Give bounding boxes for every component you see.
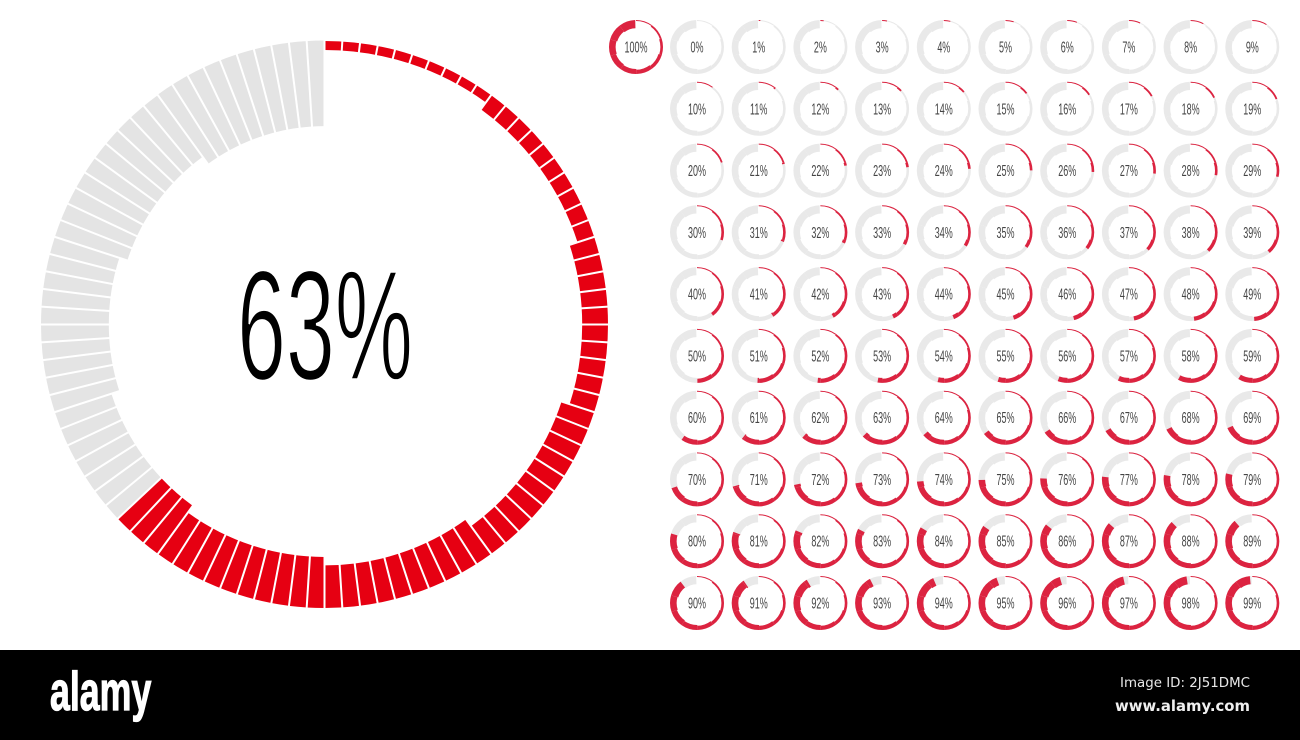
gauge 54% [917,329,970,382]
gauge 34%: 34% [935,224,953,241]
image id: Image ID: 2J51DMC [1120,675,1250,691]
footer bar [0,650,1300,740]
gauge 37%: 37% [1120,224,1138,241]
gauge 60% [670,391,724,444]
gauge 18% [1164,82,1217,135]
gauge 35% [979,206,1032,259]
gauge 65%: 65% [997,410,1014,427]
row of gauges 30 to 39 [670,206,1279,259]
gauge 37% [1102,206,1155,259]
gauge 67%: 67% [1120,410,1138,427]
gauge 49%: 49% [1243,286,1261,303]
gauge 54%: 54% [935,348,953,365]
gauge 50%: 50% [688,348,706,365]
gauge 29%: 29% [1243,163,1261,180]
gauge 36% [1041,206,1094,259]
gauge 13%: 13% [873,101,891,118]
gauge 69% [1226,391,1279,444]
gauge 8%: 8% [1184,39,1197,56]
gauge 24% [917,144,970,197]
gauge 28% [1164,144,1217,197]
gauge 32% [794,206,847,259]
gauge 21% [732,144,785,197]
gauge 11% [732,82,785,135]
gauge 29% [1226,144,1279,197]
gauge 5%: 5% [999,39,1012,56]
gauge 26%: 26% [1058,163,1076,180]
gauge 51%: 51% [750,348,768,365]
gauge 69%: 69% [1243,410,1261,427]
gauge 0%: 0% [691,39,703,56]
gauge 48% [1164,268,1217,321]
gauge 93% [856,576,909,630]
large percentage label: 63% [237,238,413,413]
gauge 61% [732,391,785,444]
gauge 98%: 98% [1182,595,1200,612]
gauge 75%: 75% [997,471,1014,489]
gauge 91%: 91% [750,595,768,612]
gauge 61%: 61% [750,410,768,427]
gauge 64% [917,391,970,444]
gauge 94%: 94% [935,595,953,612]
gauge 9%: 9% [1246,39,1259,56]
gauge 100% [610,20,662,74]
gauge 18%: 18% [1182,101,1200,118]
gauge 38%: 38% [1182,224,1200,241]
gauge 65% [979,391,1032,444]
gauge 63%: 63% [873,410,891,427]
gauge 72%: 72% [811,471,829,489]
gauge 10% [670,82,724,135]
gauge 15% [979,82,1032,135]
gauge 40% [670,268,724,321]
gauge 68% [1164,391,1217,444]
gauge 12%: 12% [811,101,829,118]
gauge 12% [794,82,847,135]
gauge 43% [856,268,909,321]
gauge 100%: 100% [625,39,647,56]
gauge 10%: 10% [688,101,706,118]
gauge 26% [1041,144,1094,197]
gauge 32%: 32% [811,224,829,241]
gauge 97% [1102,576,1155,630]
row of gauges 10 to 19 [670,82,1279,135]
red filled segments [46,46,604,604]
gauge 6%: 6% [1061,39,1074,56]
gauge 27%: 27% [1120,163,1138,180]
gauge 55% [979,329,1032,382]
gauge 38% [1164,206,1217,259]
gauge 68%: 68% [1182,410,1200,427]
gauge 25% [979,144,1032,197]
gauge 0% [670,20,724,74]
row of gauges 50 to 59 [670,329,1279,382]
gauge 7% [1102,20,1155,74]
gauge 52%: 52% [811,348,829,365]
gauge 97%: 97% [1120,595,1138,612]
gauge 11%: 11% [750,101,767,118]
gauge 83% [856,515,909,568]
gauge 56% [1041,329,1094,382]
gauge 93%: 93% [873,595,891,612]
gauge 9% [1226,20,1279,74]
gauge 60%: 60% [688,410,706,427]
gauge 2%: 2% [814,39,827,56]
gauge 92% [794,576,847,630]
gauge 86%: 86% [1058,533,1076,550]
gauge 17% [1102,82,1155,135]
gauge 23% [856,144,909,197]
gauge 25%: 25% [997,163,1014,180]
gauge 28%: 28% [1182,163,1200,180]
gauge 90%: 90% [688,595,706,612]
gauge 76% [1041,453,1094,506]
gauge 80%: 80% [688,533,706,550]
gauge 47% [1102,268,1155,321]
gauge 49% [1226,268,1279,321]
gauge 85% [979,515,1032,568]
gauge 45%: 45% [997,286,1014,303]
website: www.alamy.com [1115,697,1250,715]
gauge 41%: 41% [750,286,768,303]
gauge 16%: 16% [1058,101,1076,118]
gauge 99%: 99% [1243,595,1261,612]
gauge 58%: 58% [1182,348,1200,365]
gauge 19%: 19% [1243,101,1261,118]
gauge 96%: 96% [1058,595,1076,612]
gauge 30% [670,206,724,259]
gauge 87%: 87% [1120,533,1138,550]
gauge 79%: 79% [1243,471,1261,489]
gauge 6% [1041,20,1094,74]
gauge 39%: 39% [1243,224,1261,241]
gauge 88%: 88% [1182,533,1200,550]
gauge 94% [917,576,970,630]
gauge 73% [856,453,909,506]
gauge 85%: 85% [997,533,1014,550]
gauge 31% [732,206,785,259]
gauge 36%: 36% [1058,224,1076,241]
gauge 42%: 42% [811,286,829,303]
gauge 79% [1226,453,1279,506]
gauge 81%: 81% [750,533,768,550]
gauge 67% [1102,391,1155,444]
gauge 13% [856,82,909,135]
gauge 89%: 89% [1243,533,1261,550]
gauge 66%: 66% [1058,410,1076,427]
gauge 77% [1102,453,1155,506]
gauge 86% [1041,515,1094,568]
gauge 44%: 44% [935,286,953,303]
gauge 82%: 82% [811,533,829,550]
gauge 43%: 43% [873,286,891,303]
gauge 95% [979,576,1032,630]
gauge 21%: 21% [750,163,768,180]
gauge 17%: 17% [1120,101,1138,118]
gauge 56%: 56% [1058,348,1076,365]
gauge 91% [732,576,785,630]
gauge 46%: 46% [1058,286,1076,303]
gauge 64%: 64% [935,410,953,427]
gauge 3%: 3% [876,39,889,56]
gauge 62% [794,391,847,444]
gauge 35%: 35% [997,224,1014,241]
gauge 66% [1041,391,1094,444]
gauge 23%: 23% [873,163,891,180]
row of gauges 40 to 49 [670,268,1279,321]
gauge 5% [979,20,1032,74]
gauge 82% [794,515,847,568]
gauge 55%: 55% [997,348,1014,365]
row of gauges 80 to 89 [670,515,1279,568]
gauge 63% [856,391,909,444]
gauge 2% [794,20,847,74]
gauge 22%: 22% [811,163,829,180]
gauge 62%: 62% [811,410,829,427]
gauge 57% [1102,329,1155,382]
gauge 45% [979,268,1032,321]
row of gauges 70 to 79 [670,453,1279,506]
gauge 33%: 33% [873,224,891,241]
gauge 90% [670,576,724,630]
gauge 15%: 15% [997,101,1014,118]
gauge 20%: 20% [688,163,706,180]
gauge 71%: 71% [750,471,768,489]
gauge 8% [1164,20,1217,74]
large segmented gauge 63% [34,34,614,614]
gauge 4%: 4% [937,39,950,56]
gauge 89% [1226,515,1279,568]
grey remaining segments [71,71,578,578]
gauge 74%: 74% [935,471,953,489]
gauge 84% [917,515,970,568]
gauge 27% [1102,144,1155,197]
gauge 78%: 78% [1182,471,1200,489]
gauge 7%: 7% [1122,39,1135,56]
gauge 59%: 59% [1243,348,1261,365]
gauge 46% [1041,268,1094,321]
gauge 83%: 83% [873,533,891,550]
gauge 59% [1226,329,1279,382]
gauge 52% [794,329,847,382]
gauge 22% [794,144,847,197]
gauge 81% [732,515,785,568]
gauge 44% [917,268,970,321]
gauge 51% [732,329,785,382]
gauge 34% [917,206,970,259]
gauge 20% [670,144,724,197]
gauge 72% [794,453,847,506]
gauge 53%: 53% [873,348,891,365]
row of gauges 60 to 69 [670,391,1279,444]
gauge 40%: 40% [688,286,706,303]
row of gauges 90 to 99 [670,576,1279,630]
gauge 1%: 1% [752,39,765,56]
gauge 41% [732,268,785,321]
gauge 24%: 24% [935,163,953,180]
gauge 30%: 30% [688,224,706,241]
gauge 50% [670,329,724,382]
gauge 71% [732,453,785,506]
gauge 87% [1102,515,1155,568]
gauge 88% [1164,515,1217,568]
gauge 99% [1226,576,1279,630]
gauge 4% [917,20,970,74]
gauge 58% [1164,329,1217,382]
row of gauges 20 to 29 [670,144,1279,197]
gauge 39% [1226,206,1279,259]
gauge 74% [917,453,970,506]
gauge 42% [794,268,847,321]
gauge 70%: 70% [688,471,706,489]
gauge 57%: 57% [1120,348,1138,365]
gauge 78% [1164,453,1217,506]
row of gauges 0 to 9 [670,20,1279,74]
gauge 1% [732,20,785,74]
gauge 75% [979,453,1032,506]
gauge 33% [856,206,909,259]
gauge 48%: 48% [1182,286,1200,303]
gauge 70% [670,453,724,506]
gauge 80% [670,515,724,568]
gauge 92%: 92% [811,595,829,612]
gauge 76%: 76% [1058,471,1076,489]
gauge 96% [1041,576,1094,630]
gauge 14% [917,82,970,135]
gauge 77%: 77% [1120,471,1138,489]
gauge 19% [1226,82,1279,135]
alamy logo: alamy [50,660,152,722]
gauge 3% [856,20,909,74]
gauge 47%: 47% [1120,286,1138,303]
gauge 16% [1041,82,1094,135]
gauge 31%: 31% [750,224,768,241]
gauge 53% [856,329,909,382]
gauge 84%: 84% [935,533,953,550]
gauge 98% [1164,576,1217,630]
gauge 14%: 14% [935,101,953,118]
gauge 73%: 73% [873,471,891,489]
gauge 95%: 95% [997,595,1014,612]
